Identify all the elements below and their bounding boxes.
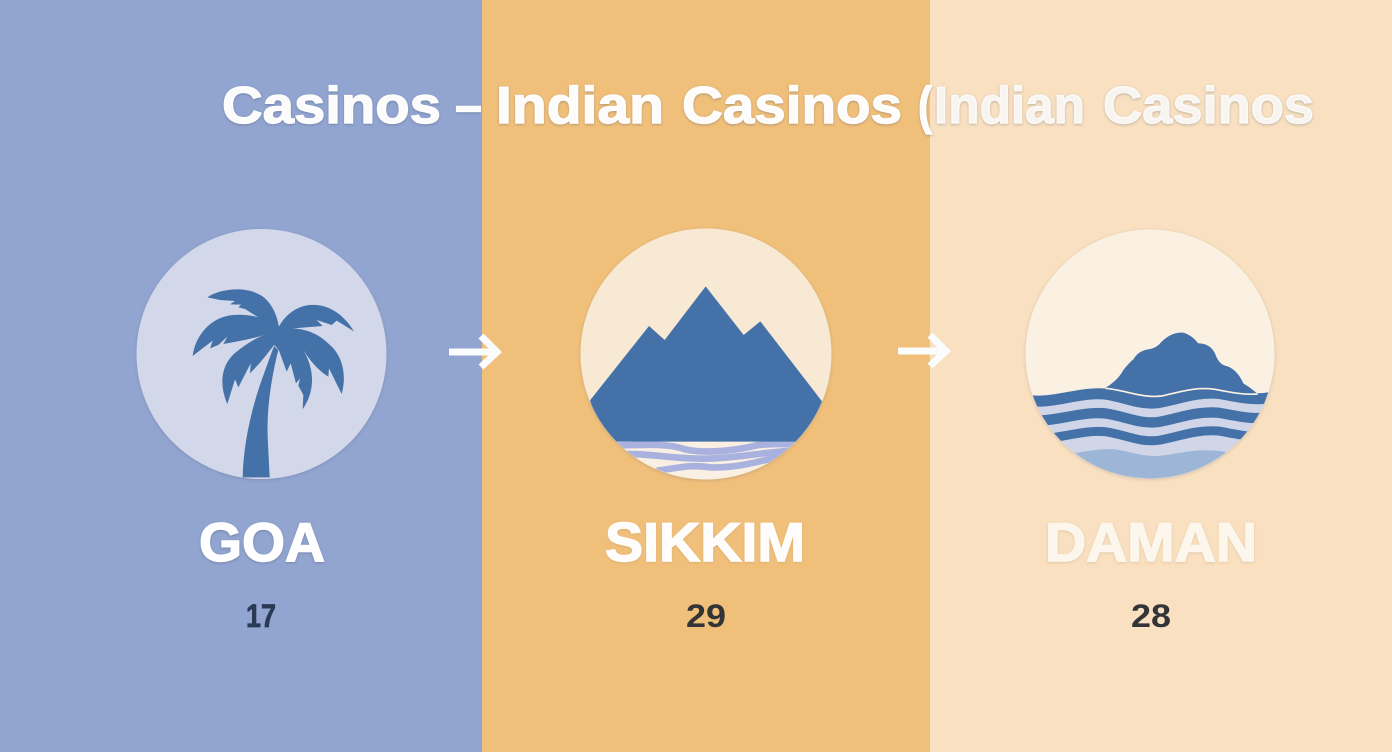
label: DAMAN: DAMAN [1045, 511, 1257, 573]
icon: island and waves in circle [1015, 230, 1282, 487]
title: Casinos [1103, 77, 1314, 135]
title: Casinos [682, 77, 902, 135]
panel: Daman background [930, 0, 1392, 752]
title: Indian [496, 77, 664, 135]
arrow: Sikkim to Daman [898, 335, 946, 366]
title: – [455, 77, 482, 135]
label: SIKKIM: SIKKIM [605, 511, 805, 573]
icon: mountain and water in circle [580, 228, 832, 482]
icon: palm tree in circle [136, 229, 386, 479]
title: ( [918, 77, 933, 135]
arrow: Goa to Sikkim [449, 336, 497, 367]
panel: Goa background [0, 0, 482, 752]
panel: Sikkim background [482, 0, 930, 752]
title: Casinos [222, 77, 441, 135]
value: Daman 28: 28 [1131, 598, 1171, 634]
label: GOA: GOA [199, 511, 325, 573]
icon hub: frond junction [265, 326, 305, 351]
value: Goa 17: 17 [246, 598, 276, 634]
title: Indian [934, 77, 1085, 135]
value: Sikkim 29: 29 [686, 598, 726, 634]
